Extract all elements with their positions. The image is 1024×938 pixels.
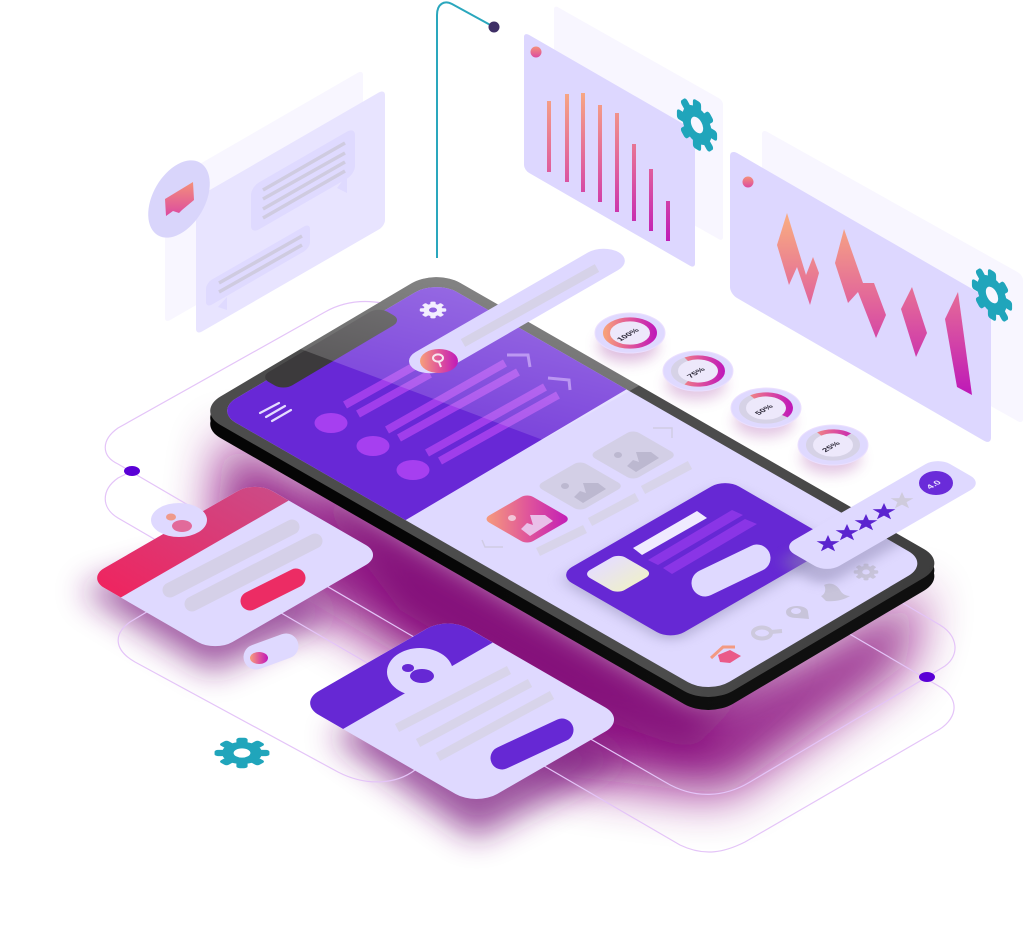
- image placeholder colored: [486, 496, 568, 542]
- purple card: [566, 483, 813, 636]
- rating stars: [817, 492, 913, 551]
- purple button: [502, 730, 562, 758]
- donut chart 100%: 100%: [615, 327, 641, 342]
- chat bubble bottom: [206, 223, 310, 310]
- connector wire teal: [437, 2, 500, 258]
- donut chart 50%: [731, 388, 801, 437]
- phone bezel: [196, 269, 949, 705]
- chevrons: [482, 428, 672, 547]
- phone screen: [227, 287, 918, 687]
- icon: gear on bar chart: [677, 89, 717, 161]
- nav icon: pin: [786, 606, 809, 619]
- header: [227, 287, 626, 520]
- phone side: [196, 276, 949, 718]
- phone gloss overlay: [301, 277, 639, 440]
- avatar: [151, 503, 207, 537]
- image placeholder gray 1: [540, 462, 621, 510]
- caption bars: [538, 465, 690, 552]
- bars: [549, 93, 668, 241]
- nav icon: search: [753, 628, 782, 638]
- toggle: [250, 646, 286, 664]
- icon: gear on zigzag chart: [972, 259, 1012, 331]
- donut chart 75%: [663, 351, 733, 400]
- connector dot left: [124, 466, 140, 476]
- nav icon: gear: [854, 564, 878, 580]
- phone: [210, 277, 934, 710]
- donut chart 25%: [798, 425, 868, 474]
- phone settings gear: [420, 302, 446, 318]
- header list dots: [314, 413, 430, 480]
- chat bubble top: [251, 127, 355, 234]
- profile card purple: [310, 624, 614, 799]
- panel: chat back sheet: [165, 70, 363, 323]
- gray text lines: [397, 670, 552, 757]
- icon: gear teal: [215, 738, 269, 768]
- header chevrons: [507, 355, 570, 390]
- red button: [250, 578, 296, 601]
- hamburger icon: [260, 403, 291, 421]
- rating badge: 4.0: [924, 479, 943, 490]
- panel: zigzag chart: [730, 149, 991, 445]
- panel: zigzag chart back sheet: [762, 129, 1023, 424]
- donut chart 50%: 50%: [753, 403, 775, 416]
- search pill: [400, 244, 634, 378]
- panel: bar chart back sheet: [554, 5, 723, 241]
- panel: chat: [196, 89, 385, 335]
- ground shadows: [80, 435, 925, 838]
- icon: chat badge: [135, 150, 223, 248]
- zigzag shapes: [777, 213, 972, 395]
- avatar: [387, 648, 453, 696]
- donut chart 75%: 75%: [685, 366, 707, 379]
- nav icon: bell: [821, 584, 850, 601]
- image placeholder gray 2: [592, 432, 674, 478]
- purple card shadow: [560, 488, 813, 644]
- connector wires: [105, 302, 955, 852]
- icon: search: [420, 349, 458, 373]
- rating card shadow on screen: [780, 538, 903, 588]
- donut chart 100%: [595, 313, 665, 362]
- rating badge: [919, 471, 953, 495]
- gray text pills: [170, 527, 315, 604]
- phone notch: [260, 307, 402, 390]
- panel: bar chart: [524, 32, 695, 269]
- donut chart 25%: 25%: [820, 440, 842, 453]
- nav icon: home: [711, 647, 741, 663]
- card header: [310, 624, 493, 729]
- connector dot right: [919, 672, 935, 682]
- rating card: [782, 457, 983, 573]
- header list bars: [345, 363, 558, 461]
- profile card red: [97, 486, 373, 646]
- card header: [87, 481, 289, 598]
